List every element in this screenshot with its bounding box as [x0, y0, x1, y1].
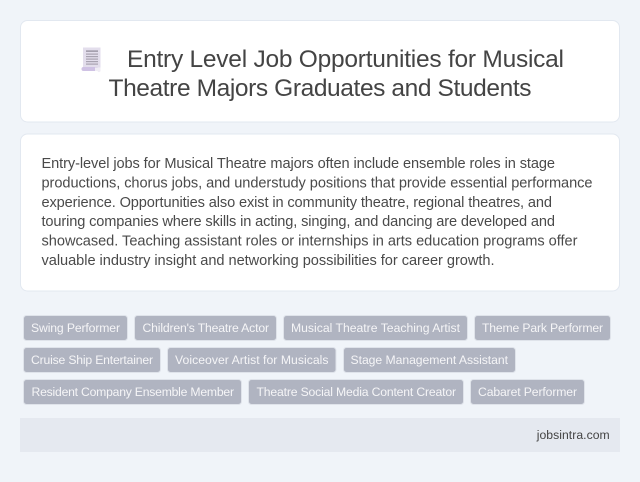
text block: description: showcased. Teaching assistant roles or internships in arts education programs offer — [42, 234, 578, 250]
tag — [344, 348, 516, 372]
title: Theatre Majors Graduates and Students — [108, 75, 532, 102]
text block: description: productions, chorus jobs, and understudy positions that provide essential performance — [42, 176, 592, 192]
tag — [24, 348, 160, 372]
tag: Stage Management Assistant — [350, 353, 509, 367]
tag — [24, 316, 128, 340]
tag — [474, 316, 610, 340]
tag — [24, 380, 242, 404]
tag: Children's Theatre Actor — [142, 321, 269, 335]
icon: paper scroll — [82, 48, 101, 72]
text block: description: touring companies where skills in acting, singing, and dancing are developed and — [42, 214, 555, 230]
tag — [168, 348, 336, 372]
footer bar — [20, 418, 620, 452]
text block: description: Entry-level jobs for Musical Theatre majors often include ensemble roles in stage — [42, 156, 555, 172]
tag — [248, 380, 464, 404]
tag: Cabaret Performer — [478, 385, 577, 399]
tag: Swing Performer — [31, 321, 120, 335]
tag — [470, 380, 584, 404]
tag: Theme Park Performer — [482, 321, 603, 335]
tag: Cruise Ship Entertainer — [31, 353, 153, 367]
text block: description: valuable industry insight and networking possibilities for career growth. — [42, 253, 494, 269]
tag: Musical Theatre Teaching Artist — [291, 321, 461, 335]
title — [108, 46, 564, 102]
panel: description card — [20, 134, 620, 291]
title: Entry Level Job Opportunities for Musical — [127, 46, 564, 73]
panel: job tags — [24, 316, 610, 404]
tag — [134, 316, 276, 340]
tag: Resident Company Ensemble Member — [32, 385, 234, 399]
tag: Voiceover Artist for Musicals — [175, 353, 328, 367]
tag — [284, 316, 468, 340]
panel: title card — [20, 20, 620, 122]
text block: description: experience. Opportunities also exist in community theatre, regional theatres, and — [42, 195, 552, 211]
tag: Theatre Social Media Content Creator — [256, 385, 456, 399]
footer source text: jobsintra.com — [536, 428, 610, 442]
text block: description — [42, 156, 592, 269]
